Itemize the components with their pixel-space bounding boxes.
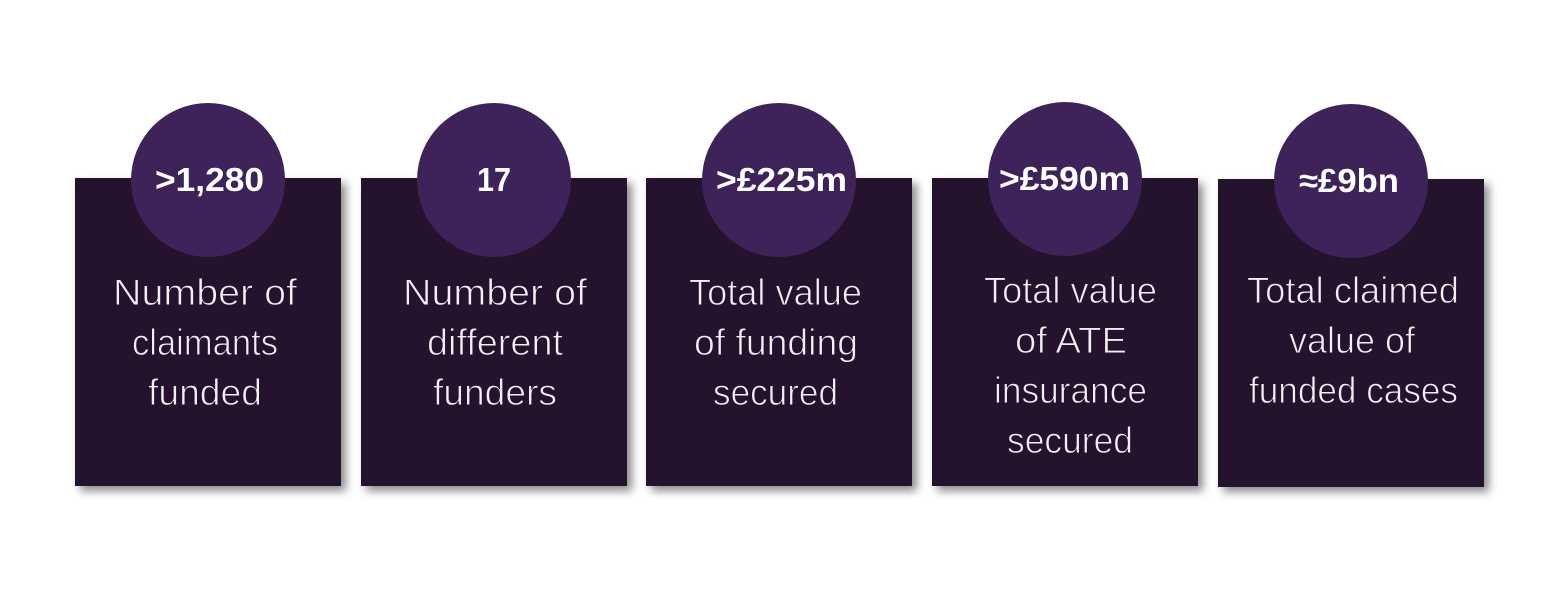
panel: ATE insurance secured	[932, 102, 1203, 491]
panel: funding secured	[646, 103, 917, 491]
label: total claimed value of funded cases	[1247, 270, 1459, 411]
label: total value of ATE insurance secured: Total value	[984, 270, 1157, 311]
label: total value of ATE insurance secured: of ATE	[1015, 320, 1127, 361]
badge: >£590m	[988, 102, 1142, 256]
label: number of claimants funded: funded	[148, 372, 262, 413]
label: total value of ATE insurance secured: secured	[1007, 420, 1133, 461]
label: number of claimants funded: Number of	[113, 272, 298, 313]
badge: >1,280	[131, 103, 285, 257]
badge: >1,280: >1,280	[155, 161, 264, 198]
badge: >£225m: >£225m	[716, 161, 847, 198]
badge: ≈£9bn	[1274, 104, 1428, 258]
label: number of different funders: Number of	[403, 272, 588, 313]
badge: ≈£9bn: ≈£9bn	[1299, 162, 1399, 199]
panel: different funders	[361, 103, 632, 491]
label: total value of ATE insurance secured: insurance	[994, 370, 1147, 411]
label: number of different funders: different	[427, 322, 564, 363]
panel: total claimed value	[1218, 104, 1489, 492]
label: total value of funding secured: of funding	[694, 322, 858, 363]
label: number of claimants funded	[113, 272, 298, 413]
label: total value of funding secured: secured	[713, 372, 838, 413]
label: total claimed value of funded cases: value of	[1289, 320, 1416, 361]
badge: >£225m	[702, 103, 856, 257]
label: total claimed value of funded cases: Total claimed	[1247, 270, 1459, 311]
label: number of different funders: funders	[433, 372, 557, 413]
badge: >£590m: >£590m	[999, 160, 1130, 197]
label: total value of funding secured	[689, 272, 862, 413]
label: number of different funders	[403, 272, 588, 413]
panel: claimants funded	[75, 103, 346, 491]
label: total claimed value of funded cases: funded cases	[1249, 370, 1458, 411]
label: total value of ATE insurance secured	[984, 270, 1157, 461]
label: total value of funding secured: Total value	[689, 272, 862, 313]
badge: 17: 17	[477, 161, 511, 198]
badge: 17	[417, 103, 571, 257]
label: number of claimants funded: claimants	[132, 322, 278, 363]
